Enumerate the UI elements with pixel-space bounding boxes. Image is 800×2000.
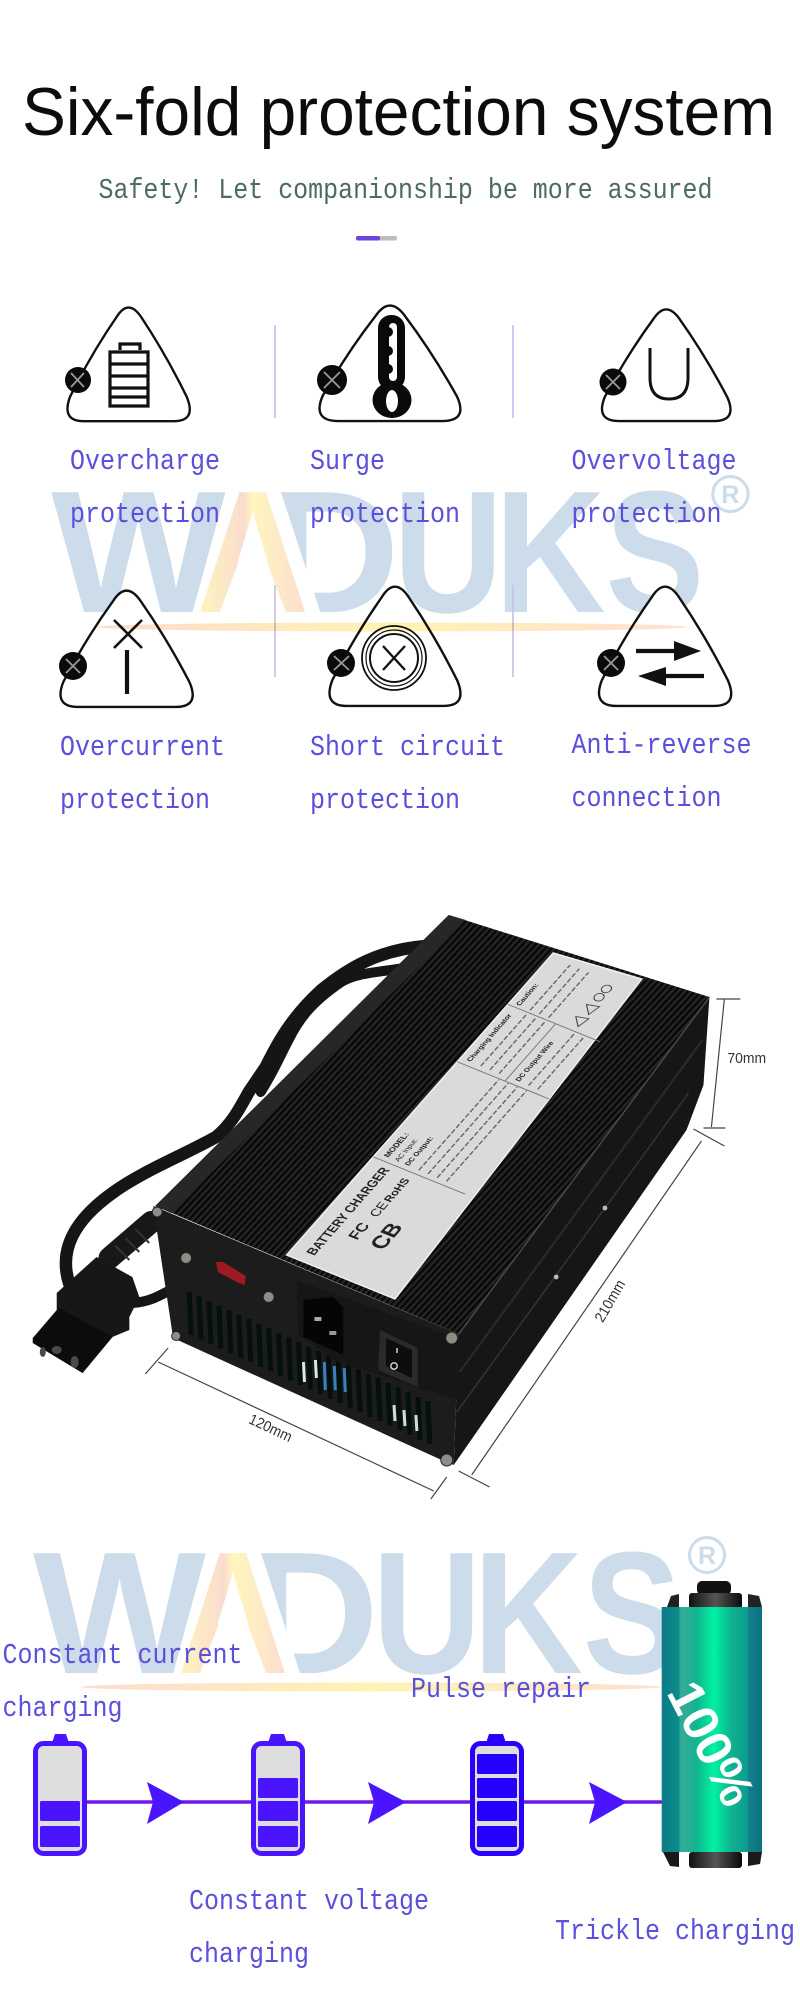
label: overvoltage protection: protection: [572, 498, 722, 531]
watermark logo: upper: U: [393, 456, 503, 650]
label: constant voltage charging: charging: [189, 1938, 309, 1971]
label: pulse repair: Pulse repair: [411, 1673, 591, 1706]
charger nameplate: MODEL:: [382, 1132, 411, 1159]
power cables: [66, 946, 426, 1303]
title: Six-fold protection system: [22, 74, 775, 150]
icon: anti-reverse arrows triangle: [597, 587, 731, 706]
charger nameplate: Caution:: [515, 983, 541, 1007]
watermark logo: lower: D: [248, 1515, 379, 1710]
watermark underline glow: upper: [97, 622, 687, 632]
charger nameplate: RoHS: [382, 1177, 413, 1204]
watermark logo: lower: S: [583, 1515, 681, 1710]
vent highlights: [303, 1360, 316, 1382]
power connector: [33, 1222, 151, 1373]
red status LED: [216, 1262, 246, 1285]
label: constant current charging: Constant current: [2, 1639, 242, 1672]
charger nameplate: Charging Indicator: [466, 1013, 514, 1063]
watermark logo: upper: A: [196, 456, 309, 650]
watermark logo: upper: K: [495, 456, 605, 650]
product: battery charger with dimensions: [33, 915, 766, 1499]
charger nameplate: DC Output:: [404, 1136, 435, 1167]
icon: battery, pulse repair stage: [472, 1734, 522, 1854]
socket plate: [297, 1280, 460, 1400]
charger side face: [454, 997, 709, 1465]
label: constant voltage charging: Constant voltage: [189, 1885, 429, 1918]
subtitle: Safety! Let companionship be more assured: [98, 174, 712, 207]
rocker switch: [378, 1330, 418, 1387]
watermark logo: lower: R: [698, 1542, 716, 1570]
title accent bar: [356, 236, 397, 240]
label: overcharge protection: protection: [70, 498, 220, 531]
label: constant current charging: [2, 1639, 242, 1725]
dimension: 210mm length: [459, 1129, 724, 1487]
label: overcharge protection: [70, 445, 220, 531]
icon: full battery 100%: 100%: [656, 1672, 766, 1815]
arrow 3: [589, 1782, 627, 1824]
label: constant current charging: charging: [2, 1692, 123, 1725]
icon: battery, constant voltage stage: [254, 1734, 302, 1854]
charger nameplate: FC: [345, 1220, 374, 1242]
label: constant voltage charging: [189, 1885, 429, 1971]
icon: overvoltage U triangle: [600, 309, 730, 421]
icon: battery, constant current stage: [36, 1734, 84, 1854]
watermark logo: lower: K: [473, 1515, 583, 1710]
charger front face: [153, 1206, 459, 1465]
arrow 1: [147, 1782, 184, 1824]
charger nameplate: CB: [364, 1219, 408, 1253]
watermark logo: upper: S: [605, 456, 704, 650]
watermark logo: lower: [33, 1515, 724, 1710]
label: anti-reverse connection: connection: [572, 782, 722, 815]
charger nameplate: BATTERY CHARGER: [303, 1165, 393, 1257]
dimension: 120mm width: 120mm: [246, 1411, 295, 1446]
label: overcurrent protection: protection: [60, 784, 210, 817]
label: overcurrent protection: [60, 731, 225, 817]
label: short circuit protection: Short circuit: [310, 731, 505, 764]
arrow 2: [368, 1782, 406, 1824]
label: surge protection: protection: [310, 498, 460, 531]
charger nameplate: AC Input:: [394, 1138, 420, 1163]
charger vent slots: [189, 1292, 430, 1444]
icon: overcharge battery triangle: [65, 308, 190, 421]
icon: surge thermometer triangle: [317, 306, 460, 421]
watermark underline glow: lower: [81, 1682, 661, 1692]
dimension: 210mm length: 210mm: [592, 1277, 629, 1325]
dimension: 70mm height: [703, 999, 766, 1128]
watermark logo: lower: A: [177, 1515, 289, 1710]
watermark logo: upper: R: [721, 481, 740, 509]
divider: top row left: [274, 325, 276, 418]
charger ribbed top face: [155, 915, 709, 1334]
charging flow line: [86, 1800, 665, 1804]
divider: top row right: [512, 325, 514, 418]
label: short circuit protection: protection: [310, 784, 460, 817]
watermark logo: upper: D: [268, 456, 400, 650]
screws: [152, 1207, 458, 1466]
label: anti-reverse connection: Anti-reverse: [572, 729, 752, 762]
charger nameplate: DC Output Wire: [515, 1041, 556, 1083]
label: surge protection: [310, 445, 460, 531]
label: surge protection: Surge: [310, 445, 385, 478]
charger nameplate: CE: [366, 1199, 392, 1219]
label: anti-reverse connection: [572, 729, 752, 815]
watermark logo: lower: W: [33, 1515, 207, 1710]
AC socket: [303, 1297, 343, 1355]
icon: overcurrent triangle: [59, 591, 193, 707]
label: overcharge protection: Overcharge: [70, 445, 220, 478]
icon: short circuit triangle: [327, 587, 460, 706]
label: overvoltage protection: [572, 445, 736, 531]
divider: bottom row right: [512, 585, 514, 677]
label: short circuit protection: [310, 731, 505, 817]
watermark logo: upper: W: [51, 456, 226, 650]
label: overcurrent protection: Overcurrent: [60, 731, 225, 764]
label: overvoltage protection: Overvoltage: [572, 445, 736, 478]
icon: full battery 100%: [656, 1581, 766, 1868]
watermark logo: lower: U: [372, 1515, 481, 1710]
charger nameplate: [287, 953, 642, 1299]
dimension: 120mm width: [145, 1348, 447, 1499]
divider: bottom row left: [274, 585, 276, 677]
dimension: 70mm height: 70mm: [727, 1050, 766, 1067]
watermark logo: upper: [51, 456, 748, 650]
